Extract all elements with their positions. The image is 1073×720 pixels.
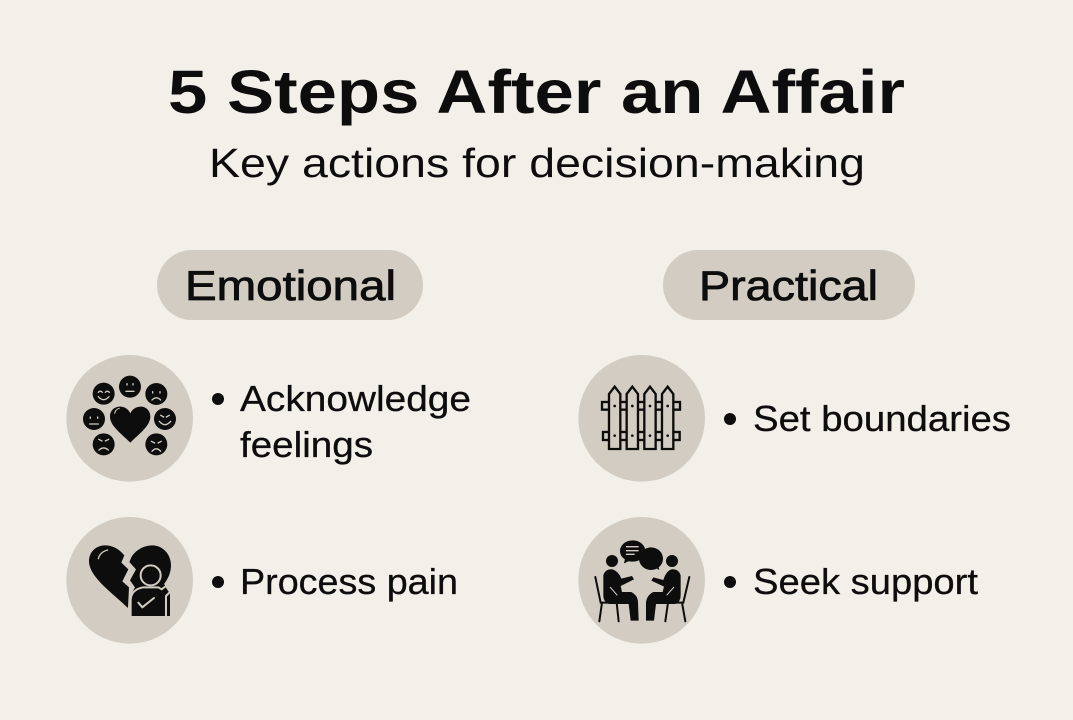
icon: broken heart with person xyxy=(66,517,193,644)
icon: fence xyxy=(578,355,705,482)
panel: emotional heading: Emotional xyxy=(185,262,396,309)
bullet: acknowledge feelings: Acknowledge xyxy=(240,378,471,419)
title: 5 Steps After an Affair xyxy=(168,58,905,126)
bullet: acknowledge feelings xyxy=(212,378,471,465)
panel: emotional heading xyxy=(157,250,423,320)
panel: practical heading xyxy=(663,250,915,320)
bullet: set boundaries: Set boundaries xyxy=(753,398,1011,439)
bullet: seek support: Seek support xyxy=(753,561,978,602)
panel: practical heading: Practical xyxy=(699,262,878,309)
bullet: acknowledge feelings: feelings xyxy=(240,424,373,465)
icon: two people talking xyxy=(578,517,705,644)
subtitle: Key actions for decision-making xyxy=(209,140,865,186)
bullet: process pain: Process pain xyxy=(240,561,458,602)
icon: faces around a heart xyxy=(66,355,193,482)
